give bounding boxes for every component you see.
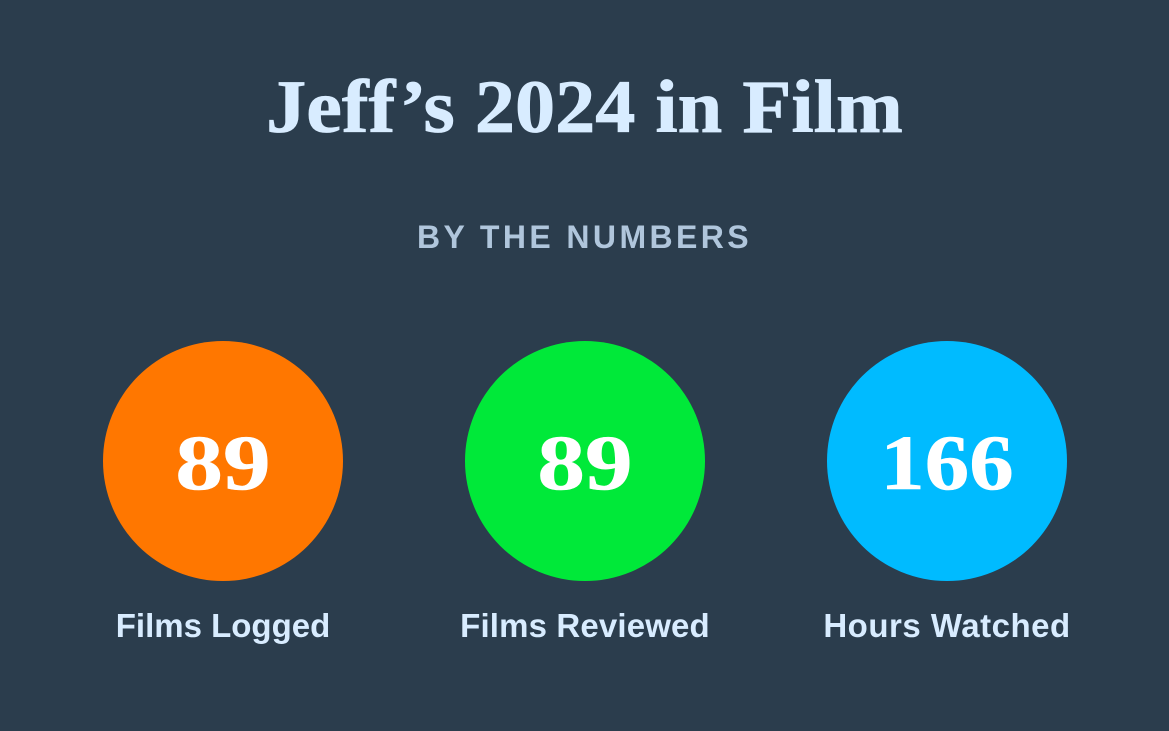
title: Jeff’s 2024 in Film bbox=[266, 66, 903, 149]
subtitle: BY THE NUMBERS bbox=[417, 219, 752, 255]
stat circle: films logged bbox=[103, 341, 343, 581]
label: films logged: Films Logged bbox=[116, 607, 330, 644]
label: films reviewed: Films Reviewed bbox=[460, 607, 710, 644]
number: 89 films logged: 89 bbox=[175, 419, 271, 506]
number: 166 hours watched: 166 bbox=[880, 419, 1014, 506]
label: hours watched: Hours Watched bbox=[823, 607, 1071, 644]
stat circle: hours watched bbox=[827, 341, 1067, 581]
stat circle: films reviewed bbox=[465, 341, 705, 581]
number: 89 films reviewed: 89 bbox=[537, 419, 633, 506]
